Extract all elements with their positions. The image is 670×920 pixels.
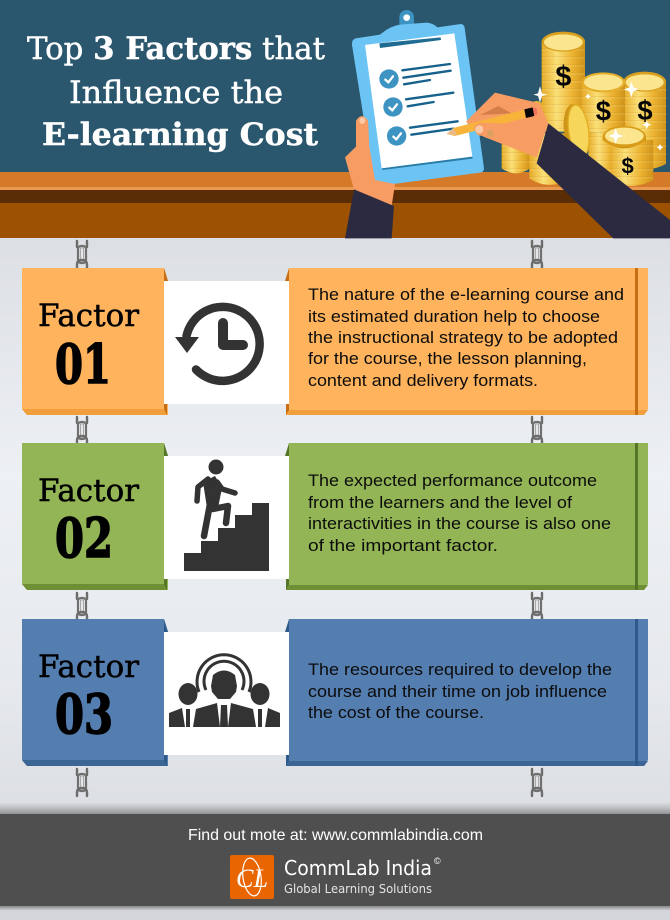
factor 03 description: course and their time on job influence — [308, 682, 607, 701]
footer — [0, 802, 670, 911]
factor 02 description: from the learners and the level of — [308, 493, 572, 512]
footer link text: Find out mote at: www.commlabindia.com — [188, 827, 483, 844]
panel: factor 03 — [22, 619, 648, 766]
factor 03 description: The resources required to develop the — [308, 660, 612, 679]
icon: jacket sleeve — [537, 123, 670, 238]
factor 01 label block: 01 — [55, 332, 111, 396]
icon: gold coin stacks: $ — [637, 95, 653, 126]
factor 01 description — [285, 268, 648, 415]
factor 02 label block: 02 — [55, 506, 113, 570]
icon: right hand with pencil — [447, 93, 548, 157]
chains: right column — [532, 241, 542, 796]
title — [27, 31, 326, 153]
factor 01 label block — [22, 268, 168, 415]
header banner — [0, 0, 670, 238]
icon: gold coin stacks: $ — [622, 153, 634, 178]
page background — [0, 238, 670, 920]
icon: clipboard with checklist — [352, 10, 484, 186]
factor 01 description: the instructional strategy to be adopted — [308, 328, 618, 347]
factor 03 label block: 03 — [55, 682, 113, 746]
title: Influence the — [69, 75, 283, 111]
logo: CommLab India: Global Learning Solutions — [284, 882, 432, 896]
logo: CommLab India: CommLab India — [284, 856, 432, 880]
icon: history clock — [175, 307, 260, 381]
icon: gold coin stacks — [502, 32, 666, 186]
factor 03 label block: Factor — [38, 649, 139, 685]
title: Top 3 Factors that — [27, 31, 326, 67]
title: E-learning Cost — [42, 117, 319, 153]
factor 01 label block: Factor — [38, 298, 139, 334]
factor 02 label block — [22, 443, 168, 590]
factor 02 label block: Factor — [38, 473, 139, 509]
panel: factor 01 — [22, 268, 648, 415]
white icon tile — [164, 456, 289, 579]
icon: person climbing stairs — [184, 460, 269, 571]
illustration: hands, clipboard and gold coins — [345, 10, 670, 238]
logo: CommLab India: © — [434, 856, 441, 866]
factor 01 description: its estimated duration help to choose — [308, 307, 600, 326]
logo: CommLab India — [230, 855, 441, 899]
icon: left hand holding clipboard — [345, 116, 395, 238]
icon: gold coin stacks: $ — [596, 96, 611, 127]
icon: gold coin stacks: $ — [555, 61, 571, 93]
icon: business team — [169, 655, 280, 727]
chains: left column — [77, 241, 87, 796]
factor 02 description: The expected performance outcome — [308, 471, 597, 490]
factor 03 label block — [22, 619, 168, 766]
factor 01 description: The nature of the e-learning course and — [308, 285, 624, 304]
factor 01 description: for the course, the lesson planning, — [308, 349, 587, 368]
factor 02 description — [285, 443, 648, 590]
factor 03 description: the cost of the course. — [308, 703, 484, 722]
panel: factor 02 — [22, 443, 648, 590]
factor 02 description: interactivities in the course is also one — [308, 514, 611, 533]
white icon tile — [164, 632, 289, 755]
factor 01 description: content and delivery formats. — [308, 371, 538, 390]
factor 03 description — [285, 619, 648, 766]
white icon tile — [164, 281, 289, 404]
logo: CommLab India: CL — [236, 864, 268, 893]
factor 02 description: of the important factor. — [308, 536, 498, 555]
